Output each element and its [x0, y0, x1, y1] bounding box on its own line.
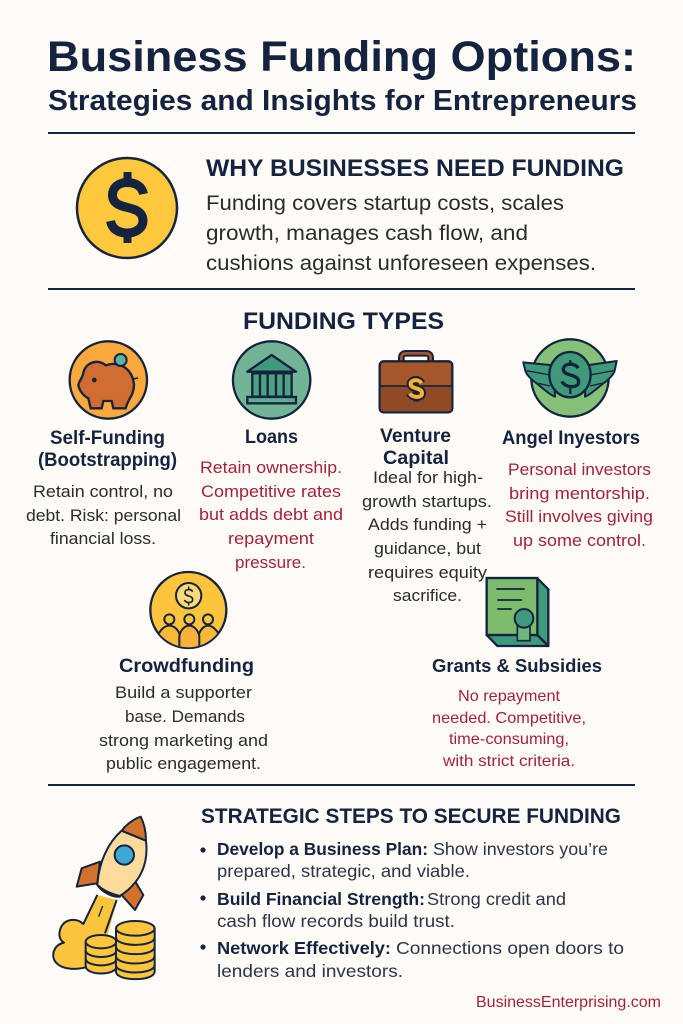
list item: business plan: Show investors you’re — [433, 839, 608, 859]
list item: financial strength: cash flow records build trust. — [217, 911, 455, 931]
text: self-funding description — [26, 482, 181, 548]
text: loans description: pressure. — [235, 553, 306, 572]
text: venture capital description: guidance, but — [374, 539, 481, 558]
text: grants description: with strict criteria. — [442, 753, 575, 770]
label: crowdfunding: Crowdfunding — [119, 656, 254, 677]
text: venture capital description: sacrifice. — [393, 586, 462, 605]
icon: briefcase — [380, 353, 452, 412]
text: crowdfunding description: strong marketing and — [99, 731, 268, 750]
panel: self-funding — [26, 341, 181, 548]
text: angel investors description: bring mentorship. — [509, 484, 650, 503]
label: venture capital: Capital — [383, 448, 449, 469]
list item: network — [200, 938, 624, 981]
icon: crowd with coin — [150, 572, 226, 652]
text: venture capital description: growth startups. — [362, 492, 492, 511]
icon: rocket and coins — [53, 817, 155, 979]
text: venture capital description: requires equity — [368, 563, 488, 582]
heading: why funding: WHY BUSINESSES NEED FUNDING — [206, 155, 624, 182]
list item: business plan — [200, 839, 608, 881]
panel: loans — [199, 341, 343, 572]
text block: why funding: cushions against unforeseen expenses. — [206, 252, 596, 275]
heading: strategic steps: STRATEGIC STEPS TO SECURE FUNDING — [201, 805, 621, 828]
text: self-funding description: debt. Risk: personal — [26, 506, 181, 525]
icon: certificate — [487, 578, 548, 646]
list item: business plan: Develop a Business Plan: — [217, 839, 428, 859]
text: self-funding description: financial loss. — [50, 529, 156, 548]
label: venture capital: Venture — [380, 426, 451, 447]
title: Business Funding Options: — [47, 33, 636, 81]
text: venture capital description: Ideal for high- — [373, 468, 483, 487]
title — [47, 33, 637, 117]
text: grants description: No repayment — [458, 688, 561, 705]
text: grants description — [432, 688, 586, 770]
text: crowdfunding description: Build a supporter — [115, 683, 252, 702]
title: Strategies and Insights for Entrepreneurs — [48, 85, 637, 117]
text: crowdfunding description: public engagement. — [106, 754, 261, 773]
text: angel investors description — [505, 460, 653, 550]
text: loans description — [199, 458, 343, 572]
icon: piggy bank — [70, 341, 147, 419]
list item: network: Network Effectively: — [217, 938, 391, 958]
label: angel investors: Angel Inyestors — [502, 428, 640, 449]
footer: website: BusinessEnterprising.com — [476, 994, 661, 1011]
text: loans description: Competitive rates — [201, 482, 341, 501]
text: loans description: repayment — [228, 529, 314, 548]
panel: why businesses need funding — [206, 155, 624, 275]
heading: funding types: FUNDING TYPES — [243, 308, 444, 335]
list item: financial strength: Strong credit and — [427, 889, 566, 909]
label: grants and subsidies: Grants & Subsidies — [432, 656, 602, 676]
panel: angel investors — [502, 339, 653, 550]
list item: financial strength — [200, 889, 566, 931]
label: self-funding: (Bootstrapping) — [38, 450, 177, 471]
text: self-funding description: Retain control, no — [33, 482, 173, 501]
text block: why funding: growth, manages cash flow, and — [206, 222, 528, 245]
label: self-funding: Self-Funding — [50, 428, 165, 449]
panel: venture capital — [362, 353, 492, 605]
icon: dollar coin — [77, 158, 177, 258]
text: angel investors description: up some control. — [513, 531, 646, 550]
list item: network: lenders and investors. — [217, 961, 403, 981]
text: loans description: but adds debt and — [199, 505, 343, 524]
text: crowdfunding description: base. Demands — [125, 707, 245, 726]
text: venture capital description: Adds funding + — [368, 515, 487, 534]
label: venture capital — [380, 426, 451, 469]
label: loans: Loans — [245, 427, 298, 448]
text: loans description: Retain ownership. — [200, 458, 342, 477]
text: angel investors description: Personal investors — [508, 460, 651, 479]
text block: why funding: Funding covers startup costs, scales — [206, 192, 564, 215]
text: angel investors description: Still involves giving — [505, 507, 653, 526]
panel: strategic steps — [200, 805, 624, 981]
label: self-funding — [38, 428, 177, 471]
panel: crowdfunding — [99, 572, 268, 773]
list item: business plan: prepared, strategic, and viable. — [217, 861, 470, 881]
list item: financial strength: Build Financial Strength: — [217, 889, 425, 909]
text: grants description: needed. Competitive, — [432, 710, 586, 727]
text: venture capital description — [362, 468, 492, 605]
icon: winged dollar — [523, 339, 617, 417]
list item: network: Connections open doors to — [396, 938, 624, 958]
text: grants description: time-consuming, — [449, 731, 569, 748]
panel: grants and subsidies — [432, 578, 602, 770]
icon: bank — [233, 341, 310, 419]
text block: why funding — [206, 192, 596, 275]
text: crowdfunding description — [99, 683, 268, 773]
